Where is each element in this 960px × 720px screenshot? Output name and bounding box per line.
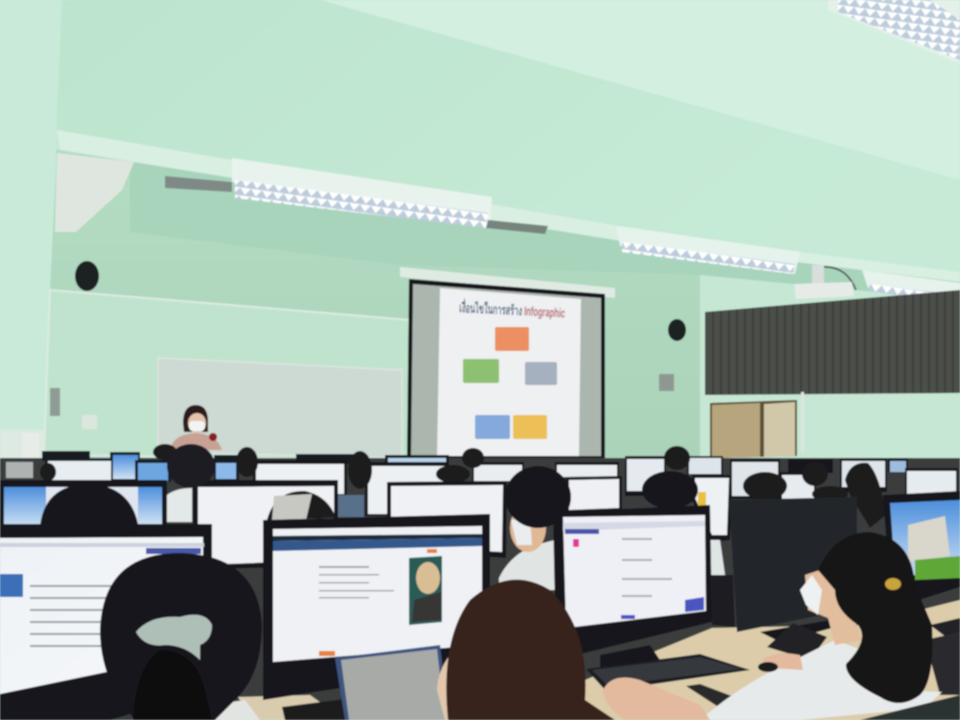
other hand [762, 653, 803, 670]
forearm [603, 678, 710, 720]
beam face [57, 0, 960, 280]
monitor: wallpaper left [0, 480, 167, 530]
paper stand [272, 494, 312, 520]
row 3 heads [40, 444, 886, 528]
foreground monitor: right [553, 505, 712, 668]
left column [0, 0, 62, 440]
foreground woman right [603, 532, 942, 720]
keyboard left [586, 654, 750, 691]
speaker right [668, 319, 686, 341]
mask [800, 575, 822, 615]
paper stand far left [6, 462, 33, 478]
person: left dark hair [40, 484, 138, 526]
door [710, 400, 797, 458]
ceiling lamp: top right [828, 0, 960, 64]
keyboard center bottom [282, 698, 358, 720]
row 2 people [40, 444, 725, 590]
person: man with mask [499, 466, 571, 590]
wall switches [22, 388, 97, 463]
box yellow [513, 415, 547, 439]
monitor: browser [193, 480, 338, 570]
speaker left [75, 261, 99, 291]
projector screen [407, 279, 605, 458]
wall pipe [801, 392, 804, 452]
projector [794, 265, 856, 299]
foreground monitor: far right [883, 491, 960, 602]
beam lower edge [57, 130, 960, 282]
ponytail [133, 650, 212, 720]
wall box [659, 374, 674, 391]
row 2 monitors [0, 475, 732, 570]
hair [818, 532, 932, 703]
wall frame board [44, 290, 410, 460]
lower room background [0, 458, 960, 720]
curtain [705, 290, 960, 395]
foreground monitor: left [0, 524, 212, 720]
box orange [495, 327, 529, 351]
scrunchie [136, 615, 212, 660]
face [805, 565, 862, 645]
slide heading: เงื่อนไขในการสร้าง Infographic [459, 298, 566, 321]
keyboard right [767, 623, 827, 660]
foreground woman with bun [100, 553, 262, 720]
ceiling [320, 0, 960, 180]
back wall [0, 150, 960, 480]
screen housing [400, 267, 615, 298]
onscreen portrait [409, 556, 442, 625]
right wall [700, 240, 960, 480]
ceiling lamp: right centre [616, 226, 800, 274]
panel beside monitor [710, 575, 735, 627]
slide [437, 288, 581, 456]
person: behind paper [267, 491, 336, 520]
hair tie [885, 578, 901, 590]
ceiling lamp: far right [862, 270, 960, 305]
phone [686, 684, 737, 708]
box blue [475, 415, 510, 439]
presenter [170, 405, 222, 450]
row 3 monitors [42, 451, 958, 516]
chair bottom [860, 695, 960, 720]
whiteboard [158, 358, 402, 458]
desk [585, 600, 960, 720]
box grey [525, 362, 557, 385]
ceiling recess [130, 160, 960, 300]
foreground monitor: center [263, 514, 490, 700]
foreground woman brown hair [437, 580, 615, 720]
mouse [758, 662, 778, 672]
air vent [55, 153, 134, 232]
box green [463, 359, 499, 383]
tablet [335, 645, 449, 720]
chair right [925, 632, 960, 695]
person: white shirt man [167, 444, 215, 522]
keyboard far right [930, 618, 960, 637]
dark monitor rear [729, 497, 857, 642]
white shirt [700, 640, 942, 720]
ceiling lamp: center [165, 158, 548, 234]
column base [0, 430, 44, 480]
